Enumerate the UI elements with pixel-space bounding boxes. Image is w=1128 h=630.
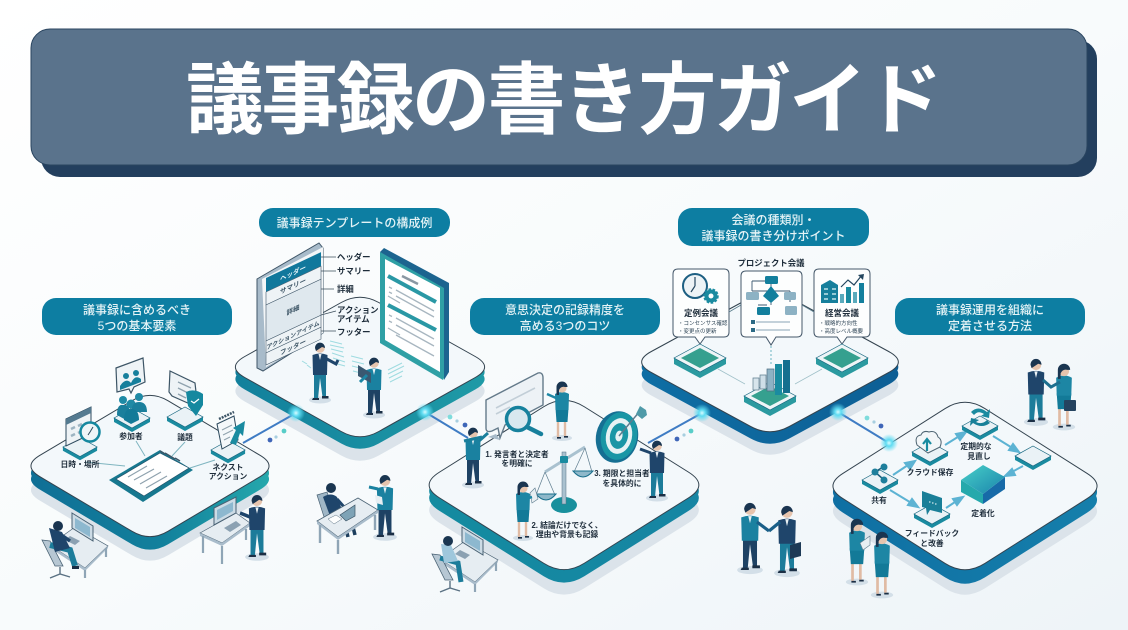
man at bubble	[462, 428, 500, 488]
heading pill: meeting types	[678, 208, 869, 246]
platform 3: decision tips	[429, 400, 699, 595]
heading pill: basic elements: 議事録に含めるべき	[83, 302, 191, 317]
heading pill: decision tips: 高める3つのコツ	[520, 318, 610, 333]
label: feedback and improvement: フィードバック	[905, 528, 959, 538]
speech bubbles: meeting types	[673, 258, 870, 345]
man pointing at target	[640, 441, 668, 502]
heading pill: basic elements	[42, 298, 232, 335]
label: next action: ネクスト	[213, 462, 243, 472]
label: agenda: 議題	[177, 432, 193, 442]
label: feedback and improvement: と改善	[920, 538, 944, 548]
bubble: regular meeting: ・コンセンサス確認	[678, 319, 728, 327]
label: tip 2: 理由や背景も記録	[536, 529, 598, 539]
title banner	[31, 29, 1097, 177]
label: periodic review: 定期的な	[960, 441, 992, 451]
icon: speech bubble with magnifier	[486, 373, 543, 438]
title text: 議事録の書き方ガイド	[186, 56, 940, 144]
template leader labels	[321, 252, 378, 337]
bubble: regular meeting: 定例会議	[684, 308, 718, 318]
heading pill: meeting types: 会議の種類別・	[731, 212, 816, 227]
label: date and place: 日時・場所	[61, 459, 100, 469]
two women reviewing	[846, 519, 893, 598]
heading pill: basic elements: 5つの基本要素	[98, 318, 176, 333]
seated person and visitor at desk in gap	[317, 475, 397, 554]
links to central notebook	[85, 441, 215, 468]
links from bubbles	[718, 305, 822, 384]
plate: blank	[1015, 446, 1051, 470]
label: tip 3: 3. 期限と担当者	[594, 468, 650, 478]
woman beside bubble	[547, 382, 572, 441]
label: feedback and improvement	[905, 528, 959, 548]
floating data snippets	[302, 341, 404, 382]
icon: participants	[114, 358, 150, 432]
template layout panel: サマリー	[280, 276, 306, 296]
label: tip 1: 1. 発言者と決定者	[485, 449, 549, 459]
heading pill: adoption	[895, 298, 1085, 335]
heading pill: template: 議事録テンプレートの構成例	[277, 215, 432, 230]
icon: next action note	[211, 412, 245, 463]
heading pill: decision tips: 意思決定の記録精度を	[505, 302, 625, 317]
label: periodic review	[960, 441, 992, 461]
template layout panel: 詳細	[287, 303, 300, 317]
template leader labels: ヘッダー	[337, 252, 370, 262]
heading pill: meeting types: 議事録の書き分けポイント	[701, 228, 846, 243]
plate: regular meeting	[674, 344, 726, 378]
connectors between platforms	[243, 403, 898, 452]
desk worker left	[42, 513, 108, 578]
heading pill: decision tips	[470, 298, 660, 335]
platform 4: meeting types	[642, 292, 898, 455]
label: cloud storage: クラウド保存	[907, 467, 954, 477]
heading pill: template	[259, 208, 450, 237]
label: next action: アクション	[209, 471, 247, 481]
label: next action	[209, 462, 247, 481]
plate: project meeting with bar chart	[744, 360, 796, 416]
label: tip 3	[594, 468, 650, 488]
bubble: executive meeting: 経営会議	[825, 308, 859, 318]
bubble: executive meeting: ・戦略的方向性	[819, 319, 858, 327]
template leader labels: 詳細	[337, 284, 354, 294]
icon: notebook	[109, 450, 193, 502]
icon: cube	[961, 465, 1005, 504]
template leader labels: アイテム	[337, 314, 370, 324]
plate: executive meeting	[816, 344, 868, 378]
heading pill: adoption: 議事録運用を組織に	[936, 302, 1044, 317]
bubble: regular meeting	[673, 269, 729, 344]
desk worker right, standing	[200, 495, 269, 564]
bubble: executive meeting: ・高度レベル概要	[819, 327, 864, 335]
handshake pair, center	[737, 503, 801, 577]
platform 5: adoption	[833, 402, 1097, 595]
label: share: 共有	[871, 495, 887, 505]
bubble: executive meeting	[814, 269, 870, 344]
template leader labels: アクション	[337, 305, 378, 315]
template layout panel: ヘッダー	[280, 262, 306, 283]
icon: balance scale	[536, 447, 593, 513]
woman at desk	[432, 527, 498, 592]
template leader labels: サマリー	[337, 266, 370, 276]
platform 1: basic elements	[31, 395, 269, 561]
label: tip 2	[531, 520, 603, 539]
label: tip 2: 2. 結論だけでなく、	[531, 520, 603, 530]
bubble: regular meeting: ・変更点の更新	[678, 327, 717, 335]
icon: feedback	[914, 491, 950, 528]
icon: cloud upload	[912, 431, 948, 466]
template layout panel: フッター	[280, 336, 306, 357]
label: tip 1	[485, 449, 549, 468]
bubble: project meeting	[738, 258, 805, 345]
adoption cycle arrows	[890, 432, 1023, 508]
label: adoption: 定着化	[971, 508, 995, 518]
woman with clipboard	[513, 482, 538, 541]
label: tip 1: を明確に	[501, 458, 533, 468]
person with laptop	[358, 358, 385, 418]
icon: calendar and clock	[63, 407, 100, 460]
label: tip 3: を具体的に	[603, 478, 642, 488]
person pointing at template	[309, 343, 338, 404]
template leader labels: フッター	[337, 327, 370, 337]
template layout panel	[257, 243, 323, 371]
icon: review cycle	[962, 408, 998, 440]
template document panel	[380, 248, 449, 380]
icon: target with arrow	[591, 406, 647, 467]
platform 2: template	[235, 297, 485, 461]
template layout panel: アクションアイテム	[266, 318, 320, 352]
bubble: project meeting: プロジェクト会議	[738, 258, 805, 268]
icon: agenda bubble	[167, 371, 203, 431]
label: periodic review: 見直し	[967, 451, 991, 461]
icon: share	[862, 464, 898, 494]
handshake pair, right	[1024, 359, 1076, 430]
heading pill: adoption: 定着させる方法	[948, 318, 1032, 333]
label: participants: 参加者	[119, 431, 143, 441]
